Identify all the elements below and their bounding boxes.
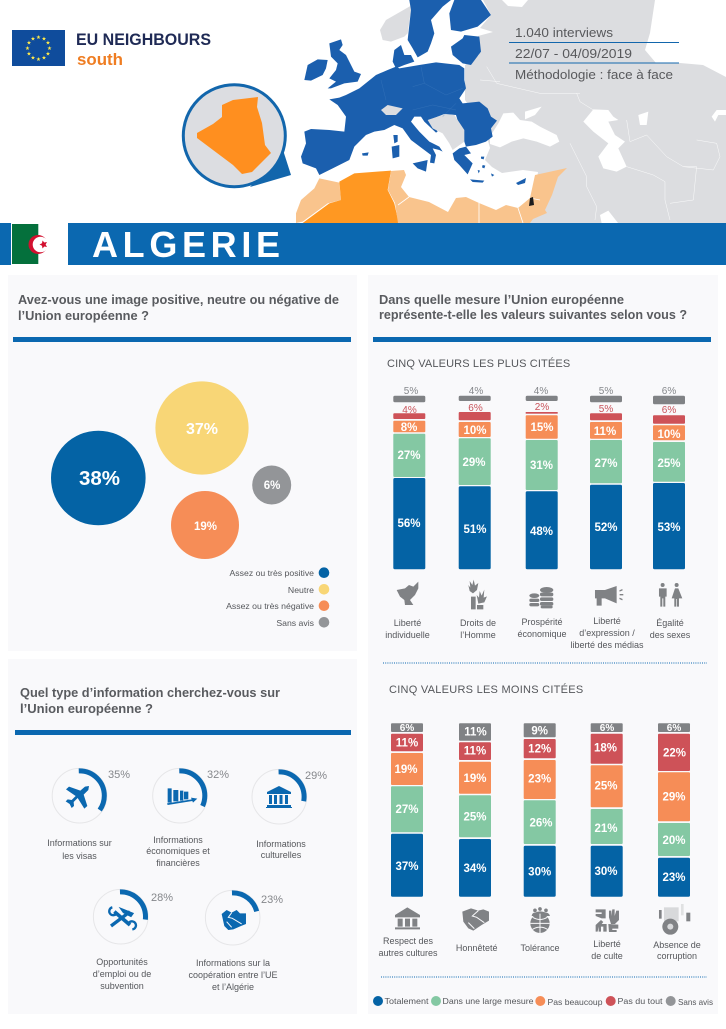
label: culture: culturelles [261,850,302,860]
map of Europe and neighbours [296,0,726,223]
survey details: 22/07 - 04/09/2019 [515,46,632,61]
subheading: most cited: CINQ VALEURS LES PLUS CITÉES [387,357,571,370]
bar: Liberté individuelle: 8% [401,422,417,434]
bar: Tolérance [524,723,556,897]
logo: EU NEIGHBOURS south: EU NEIGHBOURS [76,31,211,49]
labels: most cited values: économique [517,629,567,639]
icon: plane [66,786,89,809]
bubble: 19%: 19% [194,521,217,533]
icon: globe with people [530,907,550,933]
bubble: 38%: 38% [79,467,120,490]
heading: information question: l’Union européenne ? [20,701,153,716]
logo: EU flag: ★ [42,36,47,42]
labels: most cited values: Égalité [656,618,684,628]
bar: Tolérance: 12% [528,744,551,756]
bubble: 19% [171,491,239,559]
bar: Droits de l'Homme: 29% [462,457,486,469]
bar: Liberté individuelle: 27% [397,450,421,462]
donut: cooperation 23% [188,890,283,992]
labels: most cited values: Droits de [460,618,496,628]
bar: Prospérité économique: 4% [534,386,548,397]
legend: values [373,996,714,1007]
labels: least cited values: corruption [657,951,697,961]
legend: image [226,567,329,628]
labels: least cited values: Respect des [383,936,433,946]
icon: megaphone [595,586,623,606]
bubble: 38% [51,431,146,525]
bubble: 6%: 6% [264,480,280,492]
bar: Respect des autres cultures: 11% [396,738,418,750]
legend: image: Sans avis [276,618,315,628]
labels: most cited values [385,616,691,650]
icon: handshake [222,910,246,930]
bar: Liberté de culte: 30% [594,866,618,878]
bar: Droits de l'Homme: 51% [463,524,487,536]
bar: Droits de l'Homme: 4% [469,386,483,397]
icon: dove [397,582,418,605]
panel: EU values [368,275,718,1014]
bar: Égalité des sexes: 6% [662,405,676,416]
survey details [509,25,679,82]
subheading: least cited: CINQ VALEURS LES MOINS CITÉES [389,683,584,696]
bar: Égalité des sexes: 6% [662,386,676,397]
label: cooperation: coopération entre l’UE [188,970,278,980]
logo: EU NEIGHBOURS south: south [77,50,123,69]
donut: economic 32%: 32% [207,769,229,781]
survey details: 1.040 interviews [515,25,614,40]
legend: values: Dans une large mesure [442,996,534,1006]
logo: EU flag [12,30,65,66]
label: visas: Informations sur [47,838,112,848]
labels: most cited values: liberté des médias [570,640,644,650]
logo: EU flag: ★ [27,52,32,58]
bar: Droits de l'Homme [459,386,491,569]
logo: EU flag: ★ [36,35,41,41]
label: employment: Opportunités [96,957,148,967]
labels: least cited values: Liberté [593,939,621,949]
bar: Tolérance: 9% [531,725,548,737]
bar: Respect des autres cultures [391,723,423,897]
bar: Respect des autres cultures: 37% [395,861,419,873]
heading: image question: l’Union européenne ? [18,308,149,323]
bar: Absence de corruption: 20% [662,835,686,847]
logo: EU flag: ★ [47,46,52,52]
bar: Respect des autres cultures: 6% [400,723,414,734]
bar: Liberté d'expression: 27% [594,458,618,470]
label: employment: d’emploi ou de [93,969,151,979]
legend: image: Assez ou très positive [230,568,314,578]
icon: handshake [462,908,489,931]
logo: EU flag: ★ [36,57,41,63]
legend: image: Assez ou très négative [226,601,314,611]
bar: Liberté individuelle: 56% [397,518,421,530]
labels: most cited values: individuelle [385,630,430,640]
bar: Égalité des sexes: 10% [657,429,681,441]
icon: temple [266,786,292,808]
labels: most cited values: Liberté [593,616,621,626]
country banner [0,223,726,265]
bar: Égalité des sexes: 53% [657,522,681,534]
bar: Liberté de culte [591,723,623,897]
bar: Honnêteté: 11% [464,726,487,738]
labels: most cited values: d’expression / [579,628,635,638]
legend: values: Pas du tout [618,996,663,1006]
bubble: 37% [155,381,249,475]
labels: least cited values: de culte [591,951,623,961]
logo: EU flag: ★ [31,56,36,62]
legend: values: Totalement [384,996,429,1006]
heading: information question [20,685,280,716]
bar: Prospérité économique: 15% [530,422,554,434]
labels: most cited values: Liberté [394,618,421,628]
bar: Absence de corruption: 29% [662,792,686,804]
icon: corruption [659,904,690,935]
logo: EU flag: ★ [46,52,51,58]
bar: Respect des autres cultures: 27% [395,804,419,816]
heading: information question: Quel type d’information cherchez-vous sur [20,685,280,700]
donut: employment 28% [93,889,173,991]
bar: Liberté d'expression: 5% [599,386,613,397]
bar: Prospérité économique: 48% [530,526,553,538]
heading: image question [18,292,339,323]
bar: Égalité des sexes: 25% [657,458,681,470]
logo: EU flag: ★ [25,46,30,52]
bar: Honnêteté: 19% [463,773,487,785]
label: cooperation: Informations sur la [196,958,270,968]
labels: least cited values: Absence de [653,940,701,950]
survey details: Méthodologie : face à face [515,67,673,82]
bar: Liberté de culte: 25% [594,781,618,793]
icon: coins [529,587,553,608]
bar: Respect des autres cultures: 19% [394,764,418,776]
bar: Liberté individuelle [393,386,425,569]
bar: Prospérité économique: 31% [530,460,553,472]
bar: Honnêteté: 34% [463,863,487,875]
bar: Tolérance: 26% [529,818,553,830]
icon: Algerian flag [12,224,48,264]
legend: values: Sans avis [678,997,714,1007]
icon: tools [109,907,136,929]
bar: Liberté de culte: 18% [594,742,617,754]
icon: raised hands [468,580,487,609]
bar: Droits de l'Homme: 10% [463,425,487,437]
bar: Droits de l'Homme: 6% [468,403,483,414]
bar: Liberté d'expression: 52% [594,522,618,534]
labels: most cited values: des sexes [650,630,691,640]
donut: cooperation 23%: 23% [261,894,283,906]
inset locator: Algeria [183,85,291,187]
label: culture: Informations [256,839,306,849]
bar: Liberté d'expression [590,386,622,569]
label: visas: les visas [62,851,97,861]
bar: Égalité des sexes [653,386,685,569]
legend: values: Pas beaucoup [548,997,603,1007]
bar: Liberté de culte: 21% [594,823,618,835]
label: economic: économiques et [146,846,210,856]
bubble: 37%: 37% [186,421,218,438]
legend: image: Neutre [288,585,314,595]
label: employment: subvention [100,981,144,991]
labels: least cited values: autres cultures [378,948,438,958]
bar: Absence de corruption [658,723,690,897]
bar: Absence de corruption: 22% [663,747,686,759]
label: economic: Informations [153,835,203,845]
label: cooperation: et l’Algérie [212,982,254,992]
logo: EU flag: ★ [31,36,36,42]
bubble: 6% [252,466,291,504]
logo: EU flag: ★ [46,40,51,46]
labels: least cited values [378,936,701,961]
icon: temple [395,907,420,929]
labels: least cited values: Tolérance [520,943,560,953]
donut: visas 35%: 35% [108,769,130,781]
bar: Prospérité économique: 2% [535,402,549,413]
heading: values question [379,292,687,322]
donut: economic 32% [146,768,229,868]
logo: EU flag: ★ [27,40,32,46]
bar: Liberté individuelle: 4% [402,405,417,416]
country banner: ALGERIE [92,224,280,265]
bar: Honnêteté [459,723,491,897]
panel: image of the EU [8,275,357,651]
bar: Tolérance: 23% [528,774,551,786]
donut: visas 35% [47,768,130,861]
bar: Liberté de culte: 6% [600,723,614,734]
panel: information sought [8,659,357,1014]
bar: Absence de corruption: 6% [667,723,681,734]
logo: EU NEIGHBOURS south [76,31,211,69]
labels: most cited values: Prospérité [521,617,563,627]
heading: values question: Dans quelle mesure l’Union européenne [379,292,624,307]
donut: culture 29%: 29% [305,770,327,782]
bar: Liberté d'expression: 5% [599,404,613,415]
bar: Liberté individuelle: 5% [404,386,418,397]
heading: values question: représente-t-elle les valeurs suivantes selon vous ? [379,307,687,322]
donut: employment 28%: 28% [151,892,173,904]
bar: Honnêteté: 11% [464,746,486,758]
logo: EU flag: ★ [42,56,47,62]
donut: culture 29% [252,769,327,860]
bar: Liberté d'expression: 11% [594,426,616,438]
bar: Honnêteté: 25% [463,812,487,824]
bar: Tolérance: 30% [528,867,551,879]
icon: man and woman [659,583,682,607]
bar: Prospérité économique [526,386,558,569]
labels: least cited values: Honnêteté [456,943,497,953]
labels: most cited values: l’Homme [460,630,496,640]
icon: hands [596,909,619,932]
icon: bars and arrow [167,788,197,805]
heading: image question: Avez-vous une image positive, neutre ou négative de [18,292,339,307]
label: economic: financières [156,858,200,868]
bar: Absence de corruption: 23% [662,872,686,884]
